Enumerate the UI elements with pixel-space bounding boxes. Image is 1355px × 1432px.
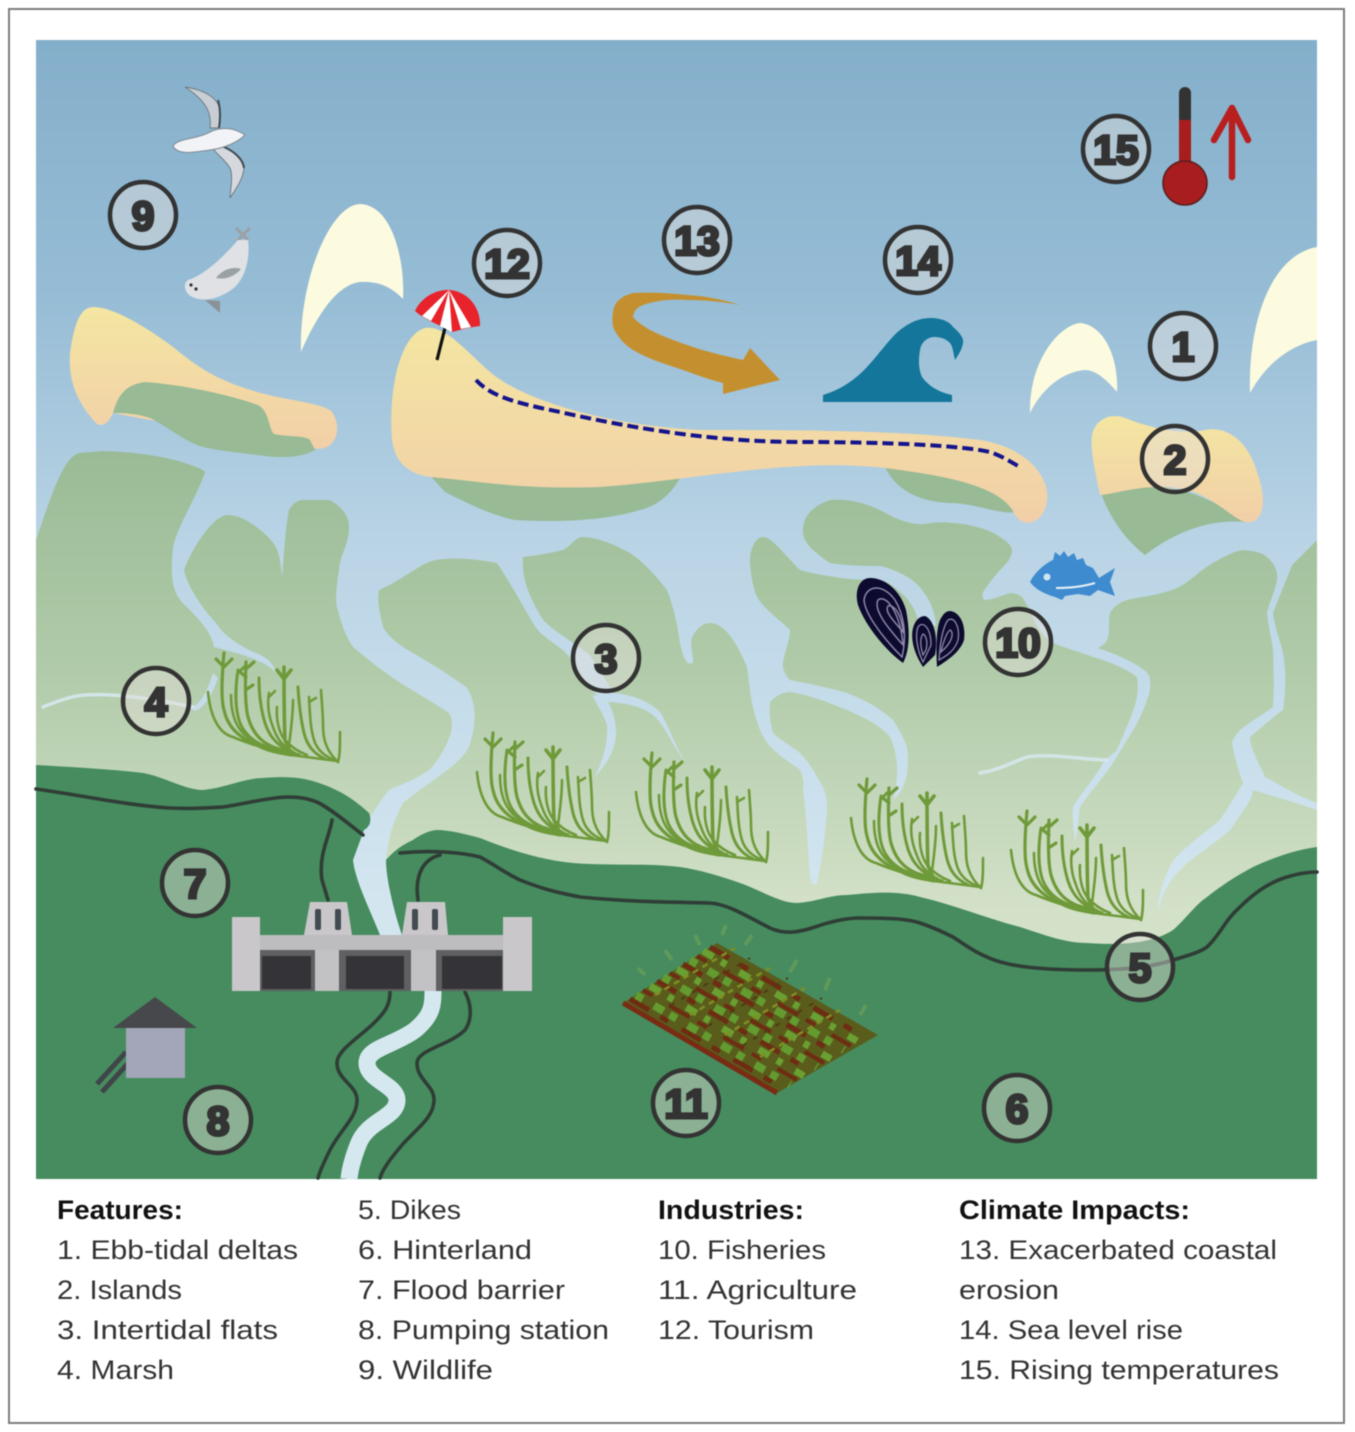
islands xyxy=(70,307,1263,555)
minor creeks xyxy=(43,695,1107,773)
badge 7 xyxy=(162,850,228,916)
badge 12 xyxy=(474,230,540,296)
badge 2 xyxy=(1142,426,1208,492)
sky and water background xyxy=(36,40,1317,1179)
legend: features xyxy=(57,1195,298,1385)
badge 3: 3 xyxy=(595,636,617,682)
icon: fish xyxy=(1030,551,1115,600)
badge 13: 13 xyxy=(674,218,720,264)
tidal channels xyxy=(172,475,1317,935)
badge 8: 8 xyxy=(207,1098,229,1144)
legend: features: 1. Ebb-tidal deltas xyxy=(57,1235,298,1265)
island salt marsh behind xyxy=(425,462,1245,555)
legend: climate impacts: Climate Impacts: xyxy=(959,1195,1190,1225)
legend: features: 4. Marsh xyxy=(57,1355,174,1385)
sand bodies xyxy=(70,307,1263,523)
badge 3 xyxy=(573,625,639,691)
badge 5 xyxy=(1107,934,1173,1000)
badge 6: 6 xyxy=(1006,1086,1028,1132)
badge 5: 5 xyxy=(1129,945,1151,991)
legend: industries: 12. Tourism xyxy=(658,1315,814,1345)
flood barrier xyxy=(232,902,532,991)
legend: features: 2. Islands xyxy=(57,1275,182,1305)
badge 1 xyxy=(1150,313,1216,379)
badge 8 xyxy=(185,1087,251,1153)
dune dashed line xyxy=(476,380,1022,468)
icon: seabird xyxy=(173,87,245,198)
icon: coastal erosion arrow xyxy=(612,293,780,394)
badge 12: 12 xyxy=(484,241,530,287)
legend: climate impacts: 15. Rising temperatures xyxy=(959,1355,1279,1385)
badge 13 xyxy=(664,207,730,273)
badge 6 xyxy=(984,1075,1050,1141)
icon: mussels xyxy=(857,578,964,667)
legend xyxy=(57,1195,1279,1385)
badge 4 xyxy=(123,668,189,734)
legend: features continued xyxy=(358,1195,609,1385)
legend: features continued: 6. Hinterland xyxy=(358,1235,532,1265)
agriculture field xyxy=(623,925,878,1093)
legend: climate impacts: 13. Exacerbated coastal xyxy=(959,1235,1277,1265)
legend: features continued: 9. Wildlife xyxy=(358,1355,493,1385)
legend: features continued: 8. Pumping station xyxy=(358,1315,609,1345)
badge 15 xyxy=(1083,116,1149,182)
legend: climate impacts: erosion xyxy=(959,1275,1059,1305)
legend: features: 3. Intertidal flats xyxy=(57,1315,278,1345)
marsh plants xyxy=(208,653,1143,920)
intertidal flats xyxy=(36,451,1317,1000)
number badges xyxy=(110,116,1216,1153)
badge 14: 14 xyxy=(895,238,941,284)
legend: climate impacts xyxy=(959,1195,1279,1385)
badge 2: 2 xyxy=(1164,437,1186,483)
badge 4: 4 xyxy=(145,679,168,725)
badge 1: 1 xyxy=(1172,324,1194,370)
badge 11 xyxy=(653,1070,719,1136)
pumping station xyxy=(97,997,197,1092)
legend: features: Features: xyxy=(57,1195,183,1225)
island salt marsh in front xyxy=(113,382,315,457)
badge 10 xyxy=(985,609,1051,675)
ebb-tidal deltas xyxy=(301,204,1317,413)
icon: wave xyxy=(823,318,963,402)
badge 10: 10 xyxy=(995,620,1041,666)
legend: industries: 11. Agriculture xyxy=(658,1275,857,1305)
icon: thermometer xyxy=(1163,87,1207,205)
legend: industries: 10. Fisheries xyxy=(658,1235,826,1265)
dikes xyxy=(36,789,1317,1178)
legend: industries: Industries: xyxy=(658,1195,804,1225)
icon: rising arrow xyxy=(1214,108,1248,177)
icon: beach umbrella xyxy=(415,290,480,360)
hinterland xyxy=(36,765,1317,1179)
legend: features continued: 5. Dikes xyxy=(358,1195,461,1225)
lower river xyxy=(349,988,433,1179)
icon: seal xyxy=(185,228,250,313)
badge 14 xyxy=(885,227,951,293)
legend: industries xyxy=(658,1195,857,1345)
badge 9: 9 xyxy=(132,193,154,239)
badge 9 xyxy=(110,182,176,248)
badge 11: 11 xyxy=(664,1081,708,1127)
legend: climate impacts: 14. Sea level rise xyxy=(959,1315,1183,1345)
badge 15: 15 xyxy=(1093,127,1139,173)
legend: features continued: 7. Flood barrier xyxy=(358,1275,565,1305)
badge 7: 7 xyxy=(184,861,206,907)
